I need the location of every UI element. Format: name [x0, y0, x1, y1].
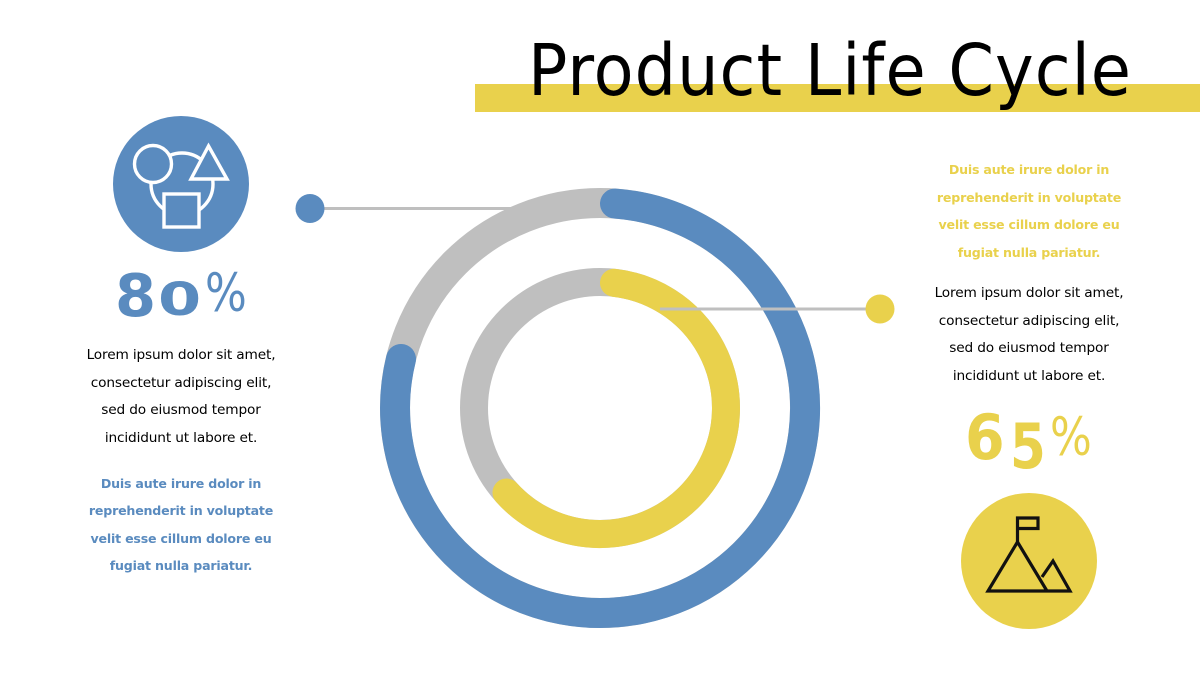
outer ring track [395, 203, 805, 613]
stat: 65%: 5 [1010, 410, 1046, 483]
text: right body: sed do eiusmod tempor [949, 340, 1109, 356]
title: Product Life Cycle [528, 29, 1132, 112]
text: right highlight: fugiat nulla pariatur. [958, 244, 1100, 260]
text: left body: Lorem ipsum dolor sit amet, [87, 347, 275, 363]
text: left body [87, 347, 275, 446]
text: right highlight: velit esse cillum dolore eu [938, 217, 1120, 232]
text: right body: incididunt ut labore et. [953, 368, 1105, 384]
title bar [475, 84, 1200, 112]
connector: right dot and line [660, 294, 894, 324]
icon: mountain with flag in yellow circle [961, 493, 1097, 629]
inner ring 65% arc [506, 283, 726, 534]
stat: 65%: 6 [965, 401, 1005, 474]
text: left highlight: Duis aute irure dolor in [101, 476, 261, 490]
text: right highlight [937, 162, 1121, 260]
text: left highlight: fugiat nulla pariatur. [110, 558, 252, 573]
icon: shapes in blue circle [113, 116, 249, 252]
text: left body: consectetur adipiscing elit, [91, 374, 271, 390]
text: left body: incididunt ut labore et. [105, 430, 257, 446]
stat: 80%: 8 [115, 261, 156, 330]
text: right body: consectetur adipiscing elit, [939, 312, 1119, 328]
text: right highlight: reprehenderit in voluptate [937, 190, 1121, 204]
stat: 80%: 0 [158, 273, 201, 326]
stat: 80%: % [205, 263, 247, 324]
text: left highlight: reprehenderit in voluptate [89, 503, 273, 518]
text: left highlight: velit esse cillum dolore eu [90, 530, 272, 546]
outer ring 80% arc [395, 204, 805, 613]
stat: 65%: % [1050, 407, 1092, 468]
text: right body [935, 285, 1123, 384]
text: right highlight: Duis aute irure dolor in [949, 162, 1109, 177]
text: left highlight [89, 476, 273, 573]
stat: 80% [115, 261, 247, 330]
connector: left dot and line [296, 194, 512, 223]
text: left body: sed do eiusmod tempor [101, 402, 261, 418]
stat: 65% [965, 401, 1092, 483]
inner ring track [474, 282, 726, 534]
text: right body: Lorem ipsum dolor sit amet, [935, 285, 1123, 301]
